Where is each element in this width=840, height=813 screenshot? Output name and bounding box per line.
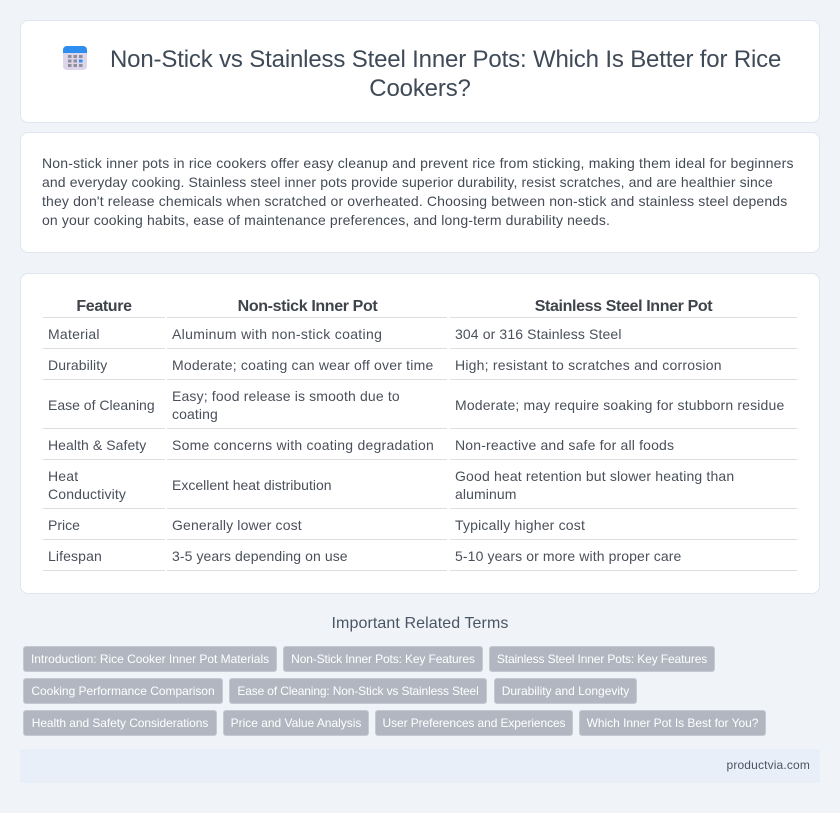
row: heat conductivity: Excellent heat distribution (172, 477, 332, 493)
related terms tags: Which Inner Pot Is Best for You? (587, 716, 758, 730)
intro text: and everyday cooking. Stainless steel inner pots provide superior durability, resist scratches, and are healthier since (42, 174, 773, 190)
row: heat conductivity: Good heat retention but slower heating than (455, 468, 734, 484)
row: health and safety: Some concerns with coating degradation (172, 437, 434, 453)
panel: comparison table (20, 273, 820, 594)
row: material (48, 326, 622, 342)
row: heat conductivity: Heat (48, 468, 78, 484)
related terms tags: Introduction: Rice Cooker Inner Pot Materials (31, 652, 269, 666)
row: lifespan: Lifespan (48, 548, 102, 564)
row: price: Typically higher cost (455, 517, 585, 533)
related terms tags: Cooking Performance Comparison (31, 684, 215, 698)
row: heat conductivity: aluminum (455, 486, 516, 502)
row: material: Material (48, 326, 100, 342)
table header (76, 298, 712, 315)
row: material: Aluminum with non-stick coating (172, 326, 382, 342)
footer bar (20, 749, 820, 783)
row: lifespan: 3-5 years depending on use (172, 548, 348, 564)
panel: title card (20, 20, 820, 123)
row: health and safety (48, 437, 674, 453)
related terms tags: Stainless Steel Inner Pots: Key Features (497, 652, 707, 666)
table header: Feature (76, 298, 132, 315)
title (110, 46, 781, 102)
panel: introduction (20, 132, 820, 253)
row: ease of cleaning: Easy; food release is smooth due to (172, 388, 400, 404)
row: durability (48, 357, 722, 373)
table header: Stainless Steel Inner Pot (535, 298, 712, 315)
row: heat conductivity (48, 468, 734, 502)
related terms tags: Health and Safety Considerations (32, 716, 208, 730)
row: lifespan: 5-10 years or more with proper care (455, 548, 681, 564)
row: lifespan (48, 548, 681, 564)
icon: calendar (63, 46, 87, 70)
related terms tags: Non-Stick Inner Pots: Key Features (291, 652, 475, 666)
related terms tags: User Preferences and Experiences (383, 716, 565, 730)
related terms tags: Ease of Cleaning: Non-Stick vs Stainless Steel (237, 684, 479, 698)
row: health and safety: Non-reactive and safe for all foods (455, 437, 674, 453)
row: ease of cleaning: Moderate; may require soaking for stubborn residue (455, 397, 784, 413)
heading: important related terms: Important Related Terms (332, 615, 508, 632)
related terms tags (23, 646, 766, 736)
row: material: 304 or 316 Stainless Steel (455, 326, 622, 342)
intro text (42, 155, 794, 228)
related terms tags: Price and Value Analysis (231, 716, 361, 730)
title: Cookers? (369, 75, 471, 102)
table header: Non-stick Inner Pot (238, 298, 377, 315)
row: health and safety: Health & Safety (48, 437, 146, 453)
intro text: they don't release chemicals when scratched or overheated. Choosing between non-stick and stainless steel depends (42, 193, 787, 209)
row: heat conductivity: Conductivity (48, 486, 126, 502)
row: price: Generally lower cost (172, 517, 302, 533)
row: price: Price (48, 517, 80, 533)
row: durability: Durability (48, 357, 107, 373)
row: durability: Moderate; coating can wear off over time (172, 357, 433, 373)
related terms tags: Durability and Longevity (502, 684, 629, 698)
intro text: Non-stick inner pots in rice cookers offer easy cleanup and prevent rice from sticking, making them ideal for beginners (42, 155, 794, 171)
row: ease of cleaning: coating (172, 406, 218, 422)
row: durability: High; resistant to scratches and corrosion (455, 357, 722, 373)
intro text: on your cooking habits, ease of maintenance preferences, and long-term durability needs. (42, 212, 610, 228)
row: ease of cleaning (48, 388, 784, 422)
title: Non-Stick vs Stainless Steel Inner Pots: Which Is Better for Rice (110, 46, 781, 73)
source credit: productvia.com (727, 758, 810, 772)
row: price (48, 517, 585, 533)
row: ease of cleaning: Ease of Cleaning (48, 397, 155, 413)
